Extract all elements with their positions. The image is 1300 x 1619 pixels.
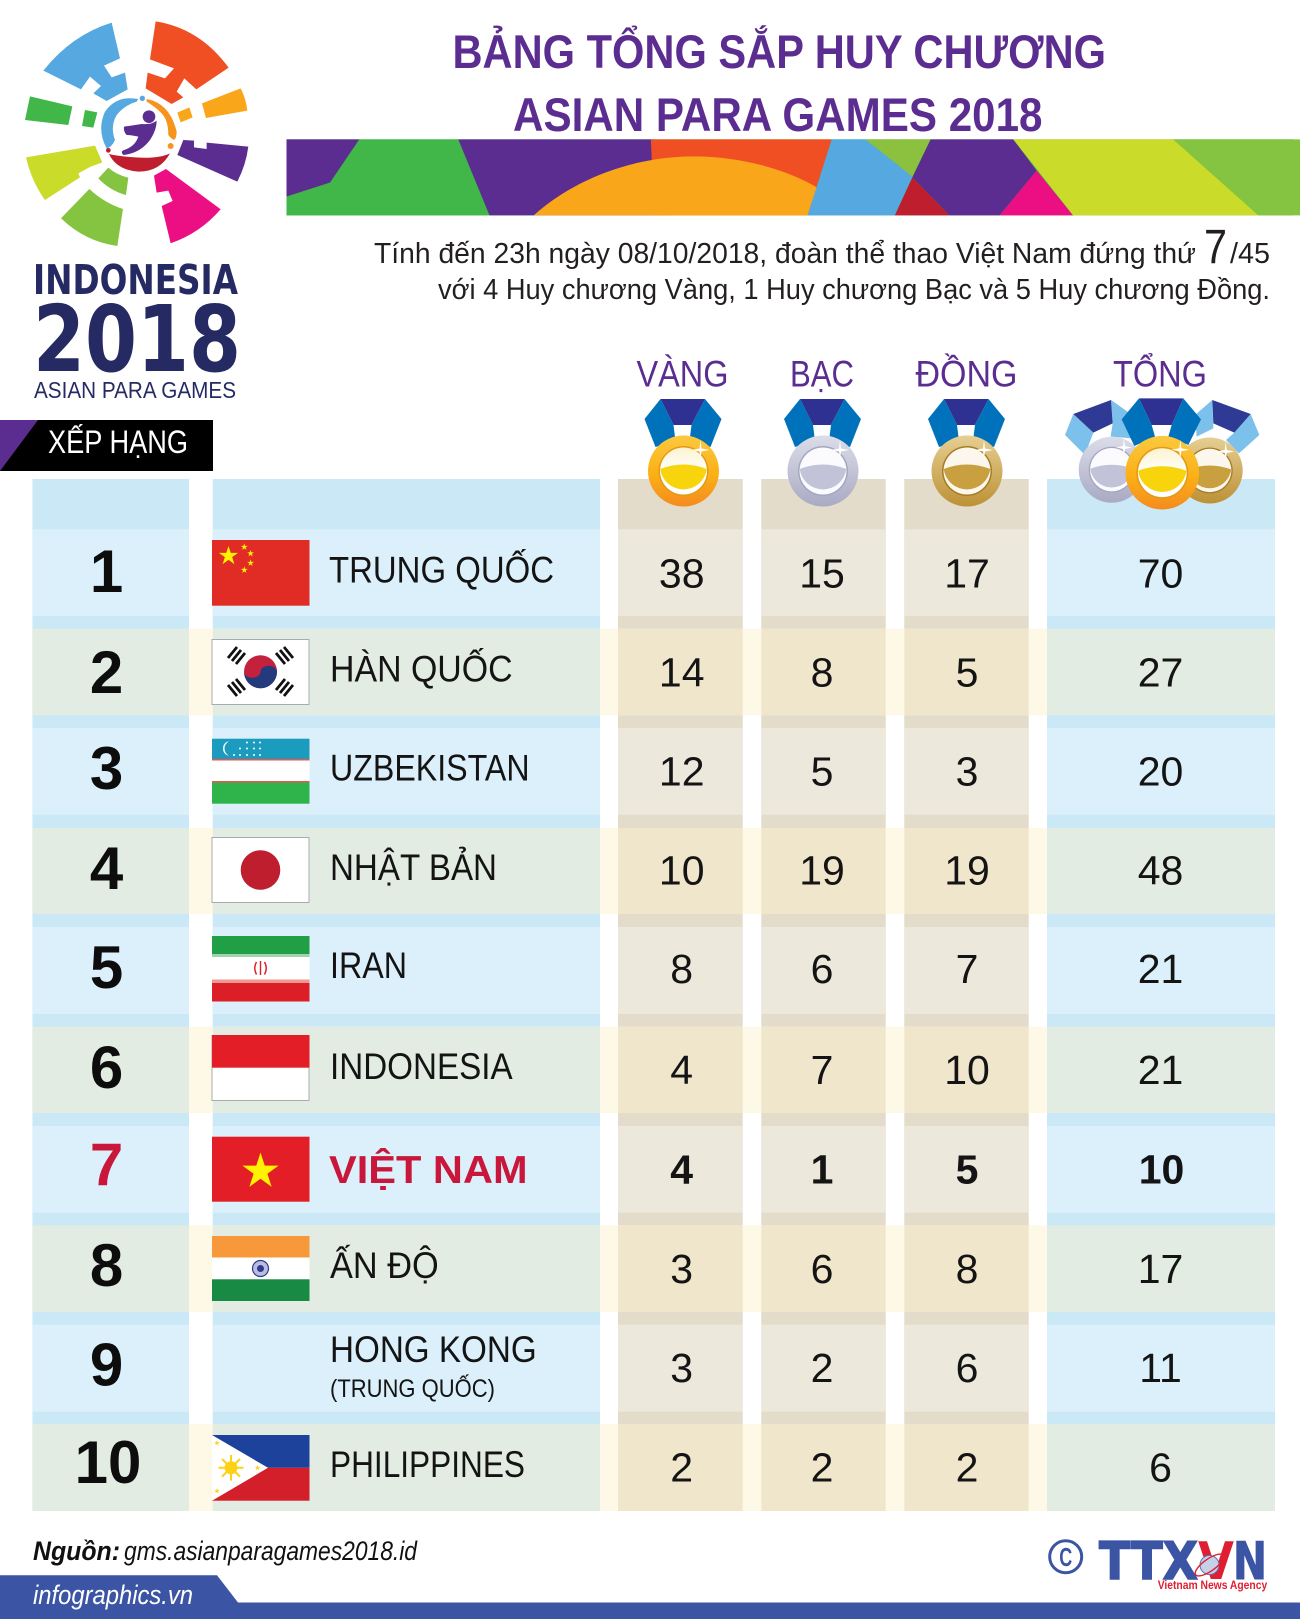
- row 10: Philippines: [32, 1424, 1275, 1511]
- footer bar with infographics.vn: infographics.vn: [33, 1580, 193, 1610]
- row 7: Việt Nam: 1: [811, 1147, 833, 1193]
- row 4: Nhật Bản: 48: [1138, 848, 1183, 894]
- row 7: Việt Nam: VIỆT NAM: [329, 1148, 528, 1192]
- row 5: Iran: 6: [811, 946, 833, 992]
- row 3: Uzbekistan: [32, 728, 1275, 815]
- row 4: Nhật Bản: 10: [659, 848, 705, 894]
- row 6: Indonesia: 7: [811, 1047, 833, 1093]
- row 10: Philippines: 2: [670, 1445, 693, 1491]
- row 4: Nhật Bản: [32, 828, 1275, 914]
- title: ASIAN PARA GAMES 2018: [513, 88, 1042, 141]
- row 1: Trung Quốc: 15: [799, 550, 845, 596]
- logo word: ASIAN PARA GAMES: ASIAN PARA GAMES: [34, 377, 236, 403]
- footer bar with infographics.vn: [0, 1575, 1300, 1619]
- row 8: Ấn Độ: 17: [1138, 1246, 1183, 1292]
- row 7: Việt Nam: 10: [1139, 1147, 1184, 1193]
- icon: copyright mark: [1050, 1541, 1082, 1573]
- row 1: Trung Quốc: 70: [1138, 550, 1183, 596]
- row 9: Hong Kong: [32, 1325, 1275, 1412]
- label: Xếp hạng: XẾP HẠNG: [48, 424, 188, 460]
- row 4: Nhật Bản: 4: [90, 835, 124, 902]
- row 10: Philippines: 10: [75, 1429, 141, 1496]
- row 10: Philippines: PHILIPPINES: [330, 1443, 525, 1485]
- row 6: Indonesia: 4: [670, 1047, 693, 1093]
- row 1: Trung Quốc: 38: [659, 550, 705, 596]
- row 2: Hàn Quốc: [32, 629, 1275, 715]
- row 1: Trung Quốc: [32, 529, 1275, 616]
- flag: Japan: [212, 838, 309, 902]
- logo: TTXVN Vietnam News Agency: V: [1198, 1532, 1234, 1592]
- row 9: Hong Kong: 6: [956, 1345, 978, 1391]
- row 8: Ấn Độ: 6: [811, 1246, 833, 1292]
- row 10: Philippines: 2: [811, 1445, 833, 1491]
- flag: Iran: [212, 936, 310, 1002]
- row 8: Ấn Độ: [32, 1225, 1275, 1312]
- source line: gms.asianparagames2018.id: [124, 1536, 418, 1566]
- row 6: Indonesia: 10: [944, 1047, 990, 1093]
- column headings: TỔNG: [1113, 352, 1207, 395]
- logo: TTXVN Vietnam News Agency: TTX: [1099, 1532, 1198, 1592]
- row 3: Uzbekistan: 5: [811, 749, 833, 795]
- row 9: Hong Kong: 2: [811, 1345, 833, 1391]
- row 3: Uzbekistan: 3: [956, 749, 978, 795]
- row 10: Philippines: 6: [1149, 1445, 1172, 1491]
- flag: Uzbekistan: [212, 739, 310, 804]
- row 7: Việt Nam: 5: [956, 1147, 978, 1193]
- title: BẢNG TỔNG SẮP HUY CHƯƠNG: [452, 25, 1106, 78]
- source line: Nguồn:: [33, 1536, 120, 1566]
- row 6: Indonesia: 21: [1138, 1047, 1183, 1093]
- logo word: INDONESIA: INDONESIA: [33, 256, 238, 304]
- row 1: Trung Quốc: TRUNG QUỐC: [329, 548, 554, 590]
- row 7: Việt Nam: 4: [670, 1147, 693, 1193]
- row 5: Iran: 8: [670, 946, 693, 992]
- flag: Philippines: [212, 1435, 310, 1501]
- column headings: ĐỒNG: [916, 353, 1018, 395]
- row 2: Hàn Quốc: 5: [956, 650, 978, 696]
- title: [452, 25, 1106, 141]
- row 4: Nhật Bản: 19: [944, 848, 990, 894]
- row 9: Hong Kong: 3: [670, 1345, 693, 1391]
- row 3: Uzbekistan: 12: [659, 749, 705, 795]
- row 9: Hong Kong: 9: [90, 1332, 123, 1398]
- row 9: Hong Kong: (TRUNG QUỐC): [330, 1373, 495, 1403]
- row 3: Uzbekistan: 20: [1138, 749, 1183, 795]
- table column backgrounds: [32, 479, 1275, 1511]
- row 6: Indonesia: 6: [90, 1034, 123, 1101]
- column headings: BẠC: [790, 353, 854, 395]
- logo word: 2018: 2018: [33, 286, 241, 393]
- flag: Indonesia: [212, 1035, 310, 1100]
- row 5: Iran: [32, 927, 1275, 1014]
- row 3: Uzbekistan: 3: [90, 735, 123, 802]
- row 8: Ấn Độ: 8: [956, 1246, 978, 1292]
- column headings: VÀNG: [636, 353, 728, 395]
- row 7: Việt Nam: [32, 1126, 1275, 1213]
- logo: TTXVN Vietnam News Agency: [1050, 1532, 1268, 1592]
- row 2: Hàn Quốc: HÀN QUỐC: [330, 648, 513, 690]
- row 1: Trung Quốc: 17: [944, 550, 990, 596]
- row 9: Hong Kong: 11: [1139, 1345, 1182, 1391]
- row 5: Iran: 5: [90, 934, 123, 1001]
- row 5: Iran: 7: [956, 946, 978, 992]
- row 10: Philippines: 2: [956, 1445, 978, 1491]
- row 5: Iran: IRAN: [330, 944, 407, 986]
- icon: three medals group: [1065, 398, 1259, 510]
- row 2: Hàn Quốc: 27: [1138, 650, 1183, 696]
- row 2: Hàn Quốc: 2: [90, 639, 123, 706]
- label: Xếp hạng: [0, 420, 213, 471]
- row 2: Hàn Quốc: 14: [659, 650, 705, 696]
- row 7: Việt Nam: 7: [90, 1131, 123, 1198]
- intro text: /45: [1230, 238, 1270, 270]
- intro text: Tính đến 23h ngày 08/10/2018, đoàn thể thao Việt Nam đứng thứ: [374, 238, 1196, 270]
- column headings: [636, 352, 1207, 395]
- icon: globe: [1192, 1550, 1227, 1580]
- icon: silver medal: [784, 399, 861, 506]
- row 9: Hong Kong: HONG KONG: [330, 1328, 537, 1370]
- intro text: [374, 221, 1270, 306]
- flag: India: [212, 1236, 310, 1301]
- intro text: 7: [1204, 221, 1227, 274]
- row 8: Ấn Độ: 8: [90, 1232, 123, 1299]
- row 5: Iran: 21: [1138, 946, 1183, 992]
- row 1: Trung Quốc: 1: [90, 538, 123, 605]
- flag: Vietnam: [212, 1137, 310, 1202]
- flag: South Korea: [212, 640, 309, 704]
- row 4: Nhật Bản: NHẬT BẢN: [330, 846, 497, 888]
- row 3: Uzbekistan: UZBEKISTAN: [330, 747, 530, 789]
- logo: Indonesia 2018 Asian Para Games: [25, 21, 248, 403]
- logo: TTXVN Vietnam News Agency: N: [1233, 1532, 1267, 1592]
- icon: logo emblem: [25, 21, 248, 246]
- row 6: Indonesia: [32, 1027, 1275, 1113]
- colour banner: [287, 139, 1300, 215]
- icon: copyright mark: C: [1059, 1542, 1072, 1572]
- source line: [33, 1536, 418, 1566]
- flag: China: [212, 540, 310, 606]
- row 6: Indonesia: INDONESIA: [330, 1045, 513, 1087]
- row 4: Nhật Bản: 19: [799, 848, 845, 894]
- icon: gold medal: [644, 399, 722, 506]
- row 2: Hàn Quốc: 8: [811, 650, 833, 696]
- intro text: với 4 Huy chương Vàng, 1 Huy chương Bạc và 5 Huy chương Đồng.: [438, 274, 1270, 306]
- logo: TTXVN Vietnam News Agency: Vietnam News Agency: [1158, 1580, 1268, 1592]
- row 8: Ấn Độ: ẤN ĐỘ: [330, 1244, 439, 1286]
- icon: bronze medal: [928, 399, 1005, 506]
- row 8: Ấn Độ: 3: [670, 1246, 693, 1292]
